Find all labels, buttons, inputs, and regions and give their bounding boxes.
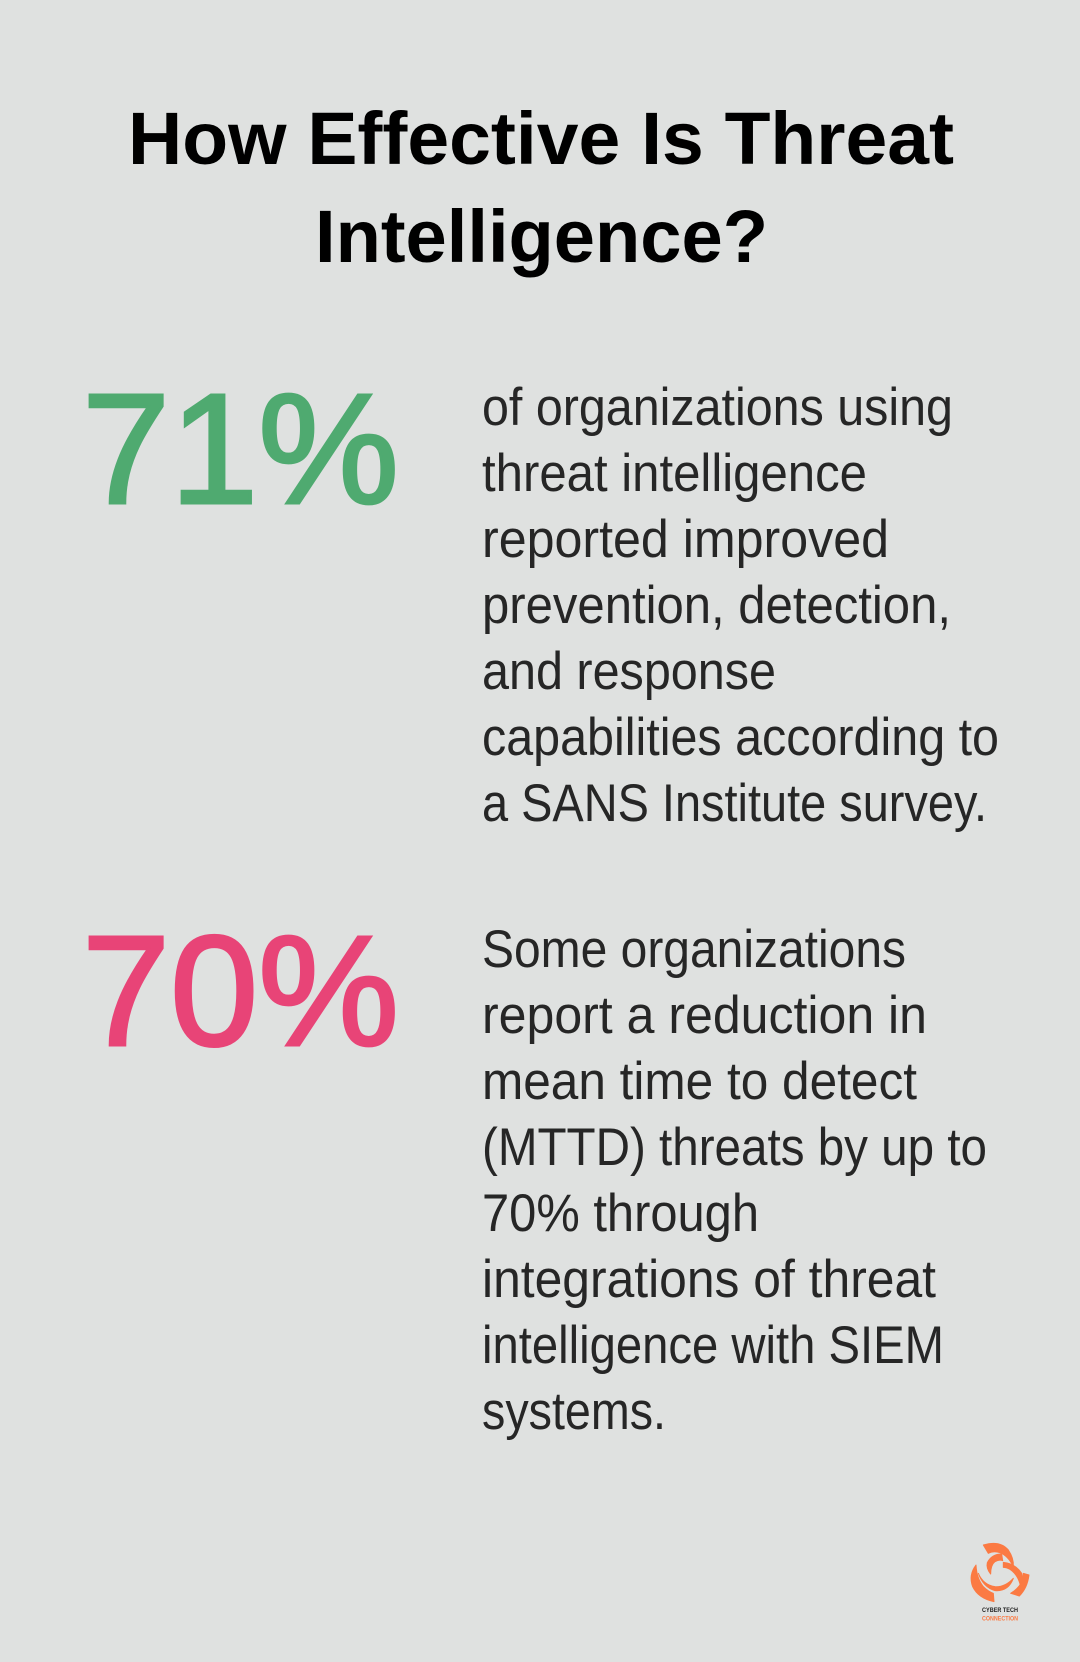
text block: 71% description [482,378,999,833]
stat: 70%: 70% [82,904,399,1079]
title: Intelligence? [315,195,768,278]
text block: 70% description: report a reduction in [482,986,927,1045]
text block: 70% description: Some organizations [482,920,906,979]
text block: 70% description: 70% through [482,1184,759,1243]
text block: 71% description: prevention, detection, [482,576,951,635]
text block: 70% description: mean time to detect [482,1052,917,1111]
logo wordmark: CYBER TECH [982,1607,1018,1614]
title [128,97,954,278]
text block: 70% description: intelligence with SIEM [482,1316,944,1375]
text block: 71% description: of organizations using [482,378,953,437]
title: How Effective Is Threat [128,97,954,180]
text block: 70% description: (MTTD) threats by up to [482,1118,987,1177]
logo: Cyber Tech Connection: CONNECTION [982,1616,1018,1622]
text block: 70% description: systems. [482,1382,666,1441]
text block: 71% description: threat intelligence [482,444,867,503]
text block: 71% description: and response [482,642,776,701]
text block: 71% description: a SANS Institute survey. [482,774,987,833]
text block: 70% description [482,920,987,1441]
text block: 71% description: reported improved [482,510,889,569]
icon: triskele swirl [971,1543,1029,1602]
stat: 71%: 71% [82,362,399,537]
text block: 71% description: capabilities according to [482,708,999,767]
text block: 70% description: integrations of threat [482,1250,936,1309]
logo: Cyber Tech Connection [971,1543,1029,1622]
